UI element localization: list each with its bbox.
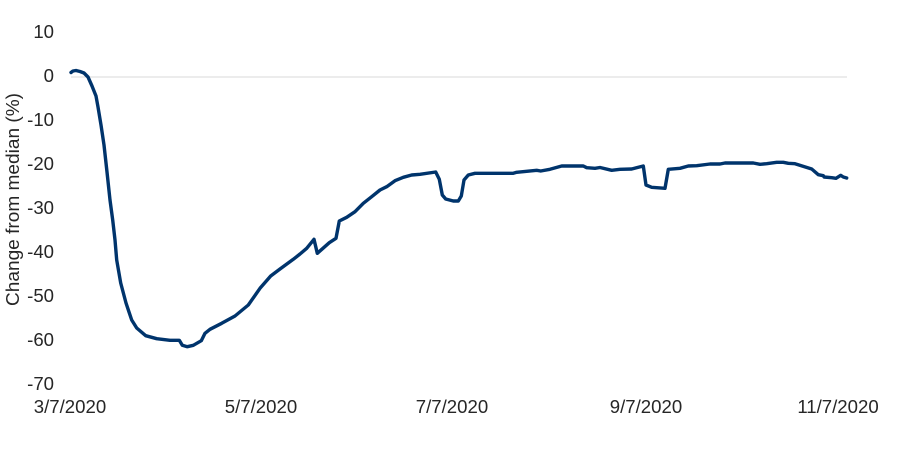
y-axis tick labels: -50: [27, 285, 54, 306]
y-axis tick labels: [27, 21, 54, 394]
y-axis tick labels: -70: [27, 373, 54, 394]
y-axis tick labels: 0: [44, 65, 54, 86]
y-axis tick labels: -30: [27, 197, 54, 218]
x-axis tick labels: 5/7/2020: [225, 396, 297, 417]
y-axis tick labels: -40: [27, 241, 54, 262]
x-axis tick labels: 3/7/2020: [34, 396, 106, 417]
x-axis tick labels: [34, 396, 879, 417]
x-axis tick labels: 7/7/2020: [416, 396, 488, 417]
y-axis tick labels: -20: [27, 153, 54, 174]
data line: [71, 70, 847, 347]
zero baseline: [71, 76, 847, 78]
y-axis tick labels: -60: [27, 329, 54, 350]
x-axis tick labels: 9/7/2020: [610, 396, 682, 417]
y-axis title: Change from median (%): [2, 93, 23, 306]
x-axis tick labels: 11/7/2020: [797, 396, 879, 417]
y-axis tick labels: 10: [33, 21, 54, 42]
y-axis tick labels: -10: [27, 109, 54, 130]
